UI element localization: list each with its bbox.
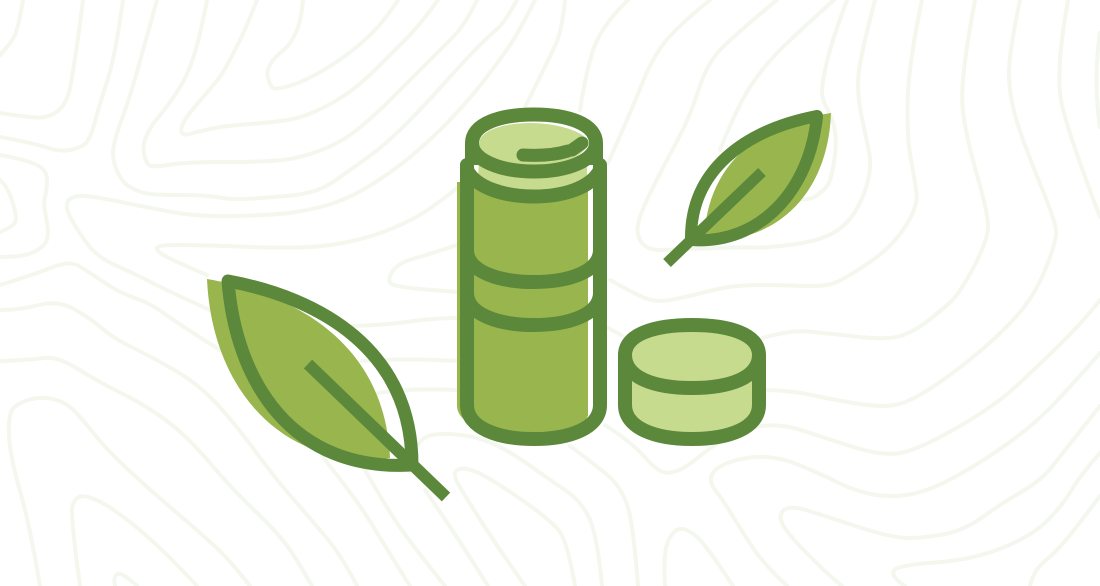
icon: small leaf [667,113,831,263]
icon: large leaf [207,279,446,497]
tube highlight stroke [523,143,582,155]
jar lid [625,325,759,388]
tube bands [467,170,600,325]
small leaf outline [691,116,817,240]
large leaf outline [228,281,412,465]
tube lid [472,114,596,160]
icon: lip balm tube [457,114,600,439]
tube top fill [479,123,588,165]
small leaf vein and stem [667,172,762,263]
large leaf vein and stem [308,364,446,497]
icon: lip balm jar [625,325,759,439]
small leaf fill [702,113,831,240]
tube body fill [457,182,588,432]
jar body [625,355,759,439]
tube neck fill [478,160,587,191]
tube body outline [467,165,600,439]
tube top rim [472,114,596,172]
large leaf fill [207,279,390,459]
